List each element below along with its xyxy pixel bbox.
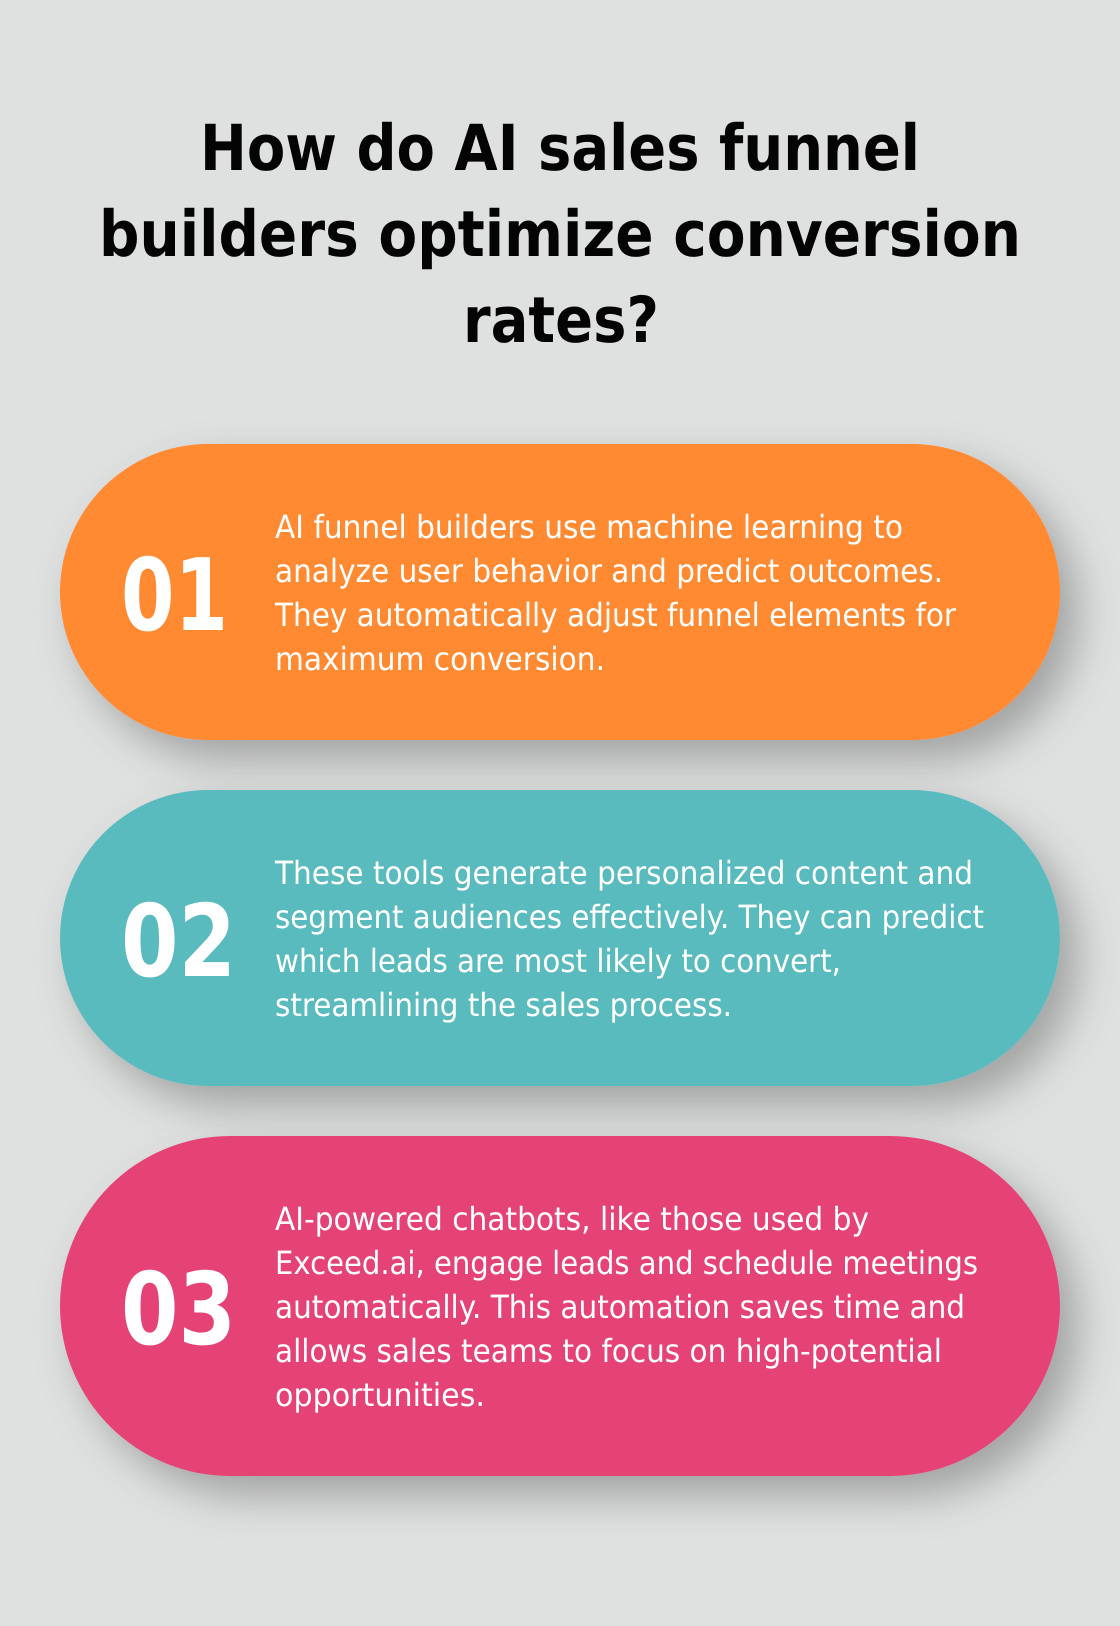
body text 01: AI funnel builders use machine learning to — [275, 508, 903, 546]
title: rates? — [463, 283, 659, 357]
orange pill — [60, 444, 1060, 740]
number 03: 03 — [121, 1251, 236, 1368]
panel: step 01 — [60, 444, 1060, 740]
body text 03 — [275, 1200, 978, 1414]
panel: step 02 — [60, 790, 1060, 1086]
body text 03: AI-powered chatbots, like those used by — [275, 1200, 869, 1238]
panel: step 03 — [60, 1136, 1060, 1476]
body text 03: allows sales teams to focus on high-potential — [275, 1332, 942, 1370]
body text 01: maximum conversion. — [275, 640, 605, 678]
body text 02: streamlining the sales process. — [275, 986, 732, 1024]
number 01: 01 — [121, 537, 228, 654]
body text 03: automatically. This automation saves time and — [275, 1288, 965, 1326]
title: How do AI sales funnel — [200, 111, 920, 185]
pink pill — [60, 1136, 1060, 1476]
body text 02: which leads are most likely to convert, — [275, 942, 841, 980]
body text 01 — [274, 508, 957, 678]
title: builders optimize conversion — [99, 197, 1021, 271]
title — [99, 111, 1021, 357]
body text 02: segment audiences effectively. They can predict — [275, 898, 984, 936]
number 02: 02 — [121, 883, 236, 1000]
body text 02 — [274, 854, 984, 1024]
body text 01: They automatically adjust funnel elements for — [274, 596, 957, 634]
teal pill — [60, 790, 1060, 1086]
body text 01: analyze user behavior and predict outcomes. — [275, 552, 943, 590]
body text 03: Exceed.ai, engage leads and schedule meetings — [275, 1244, 978, 1282]
body text 03: opportunities. — [275, 1376, 485, 1414]
body text 02: These tools generate personalized content and — [274, 854, 973, 892]
